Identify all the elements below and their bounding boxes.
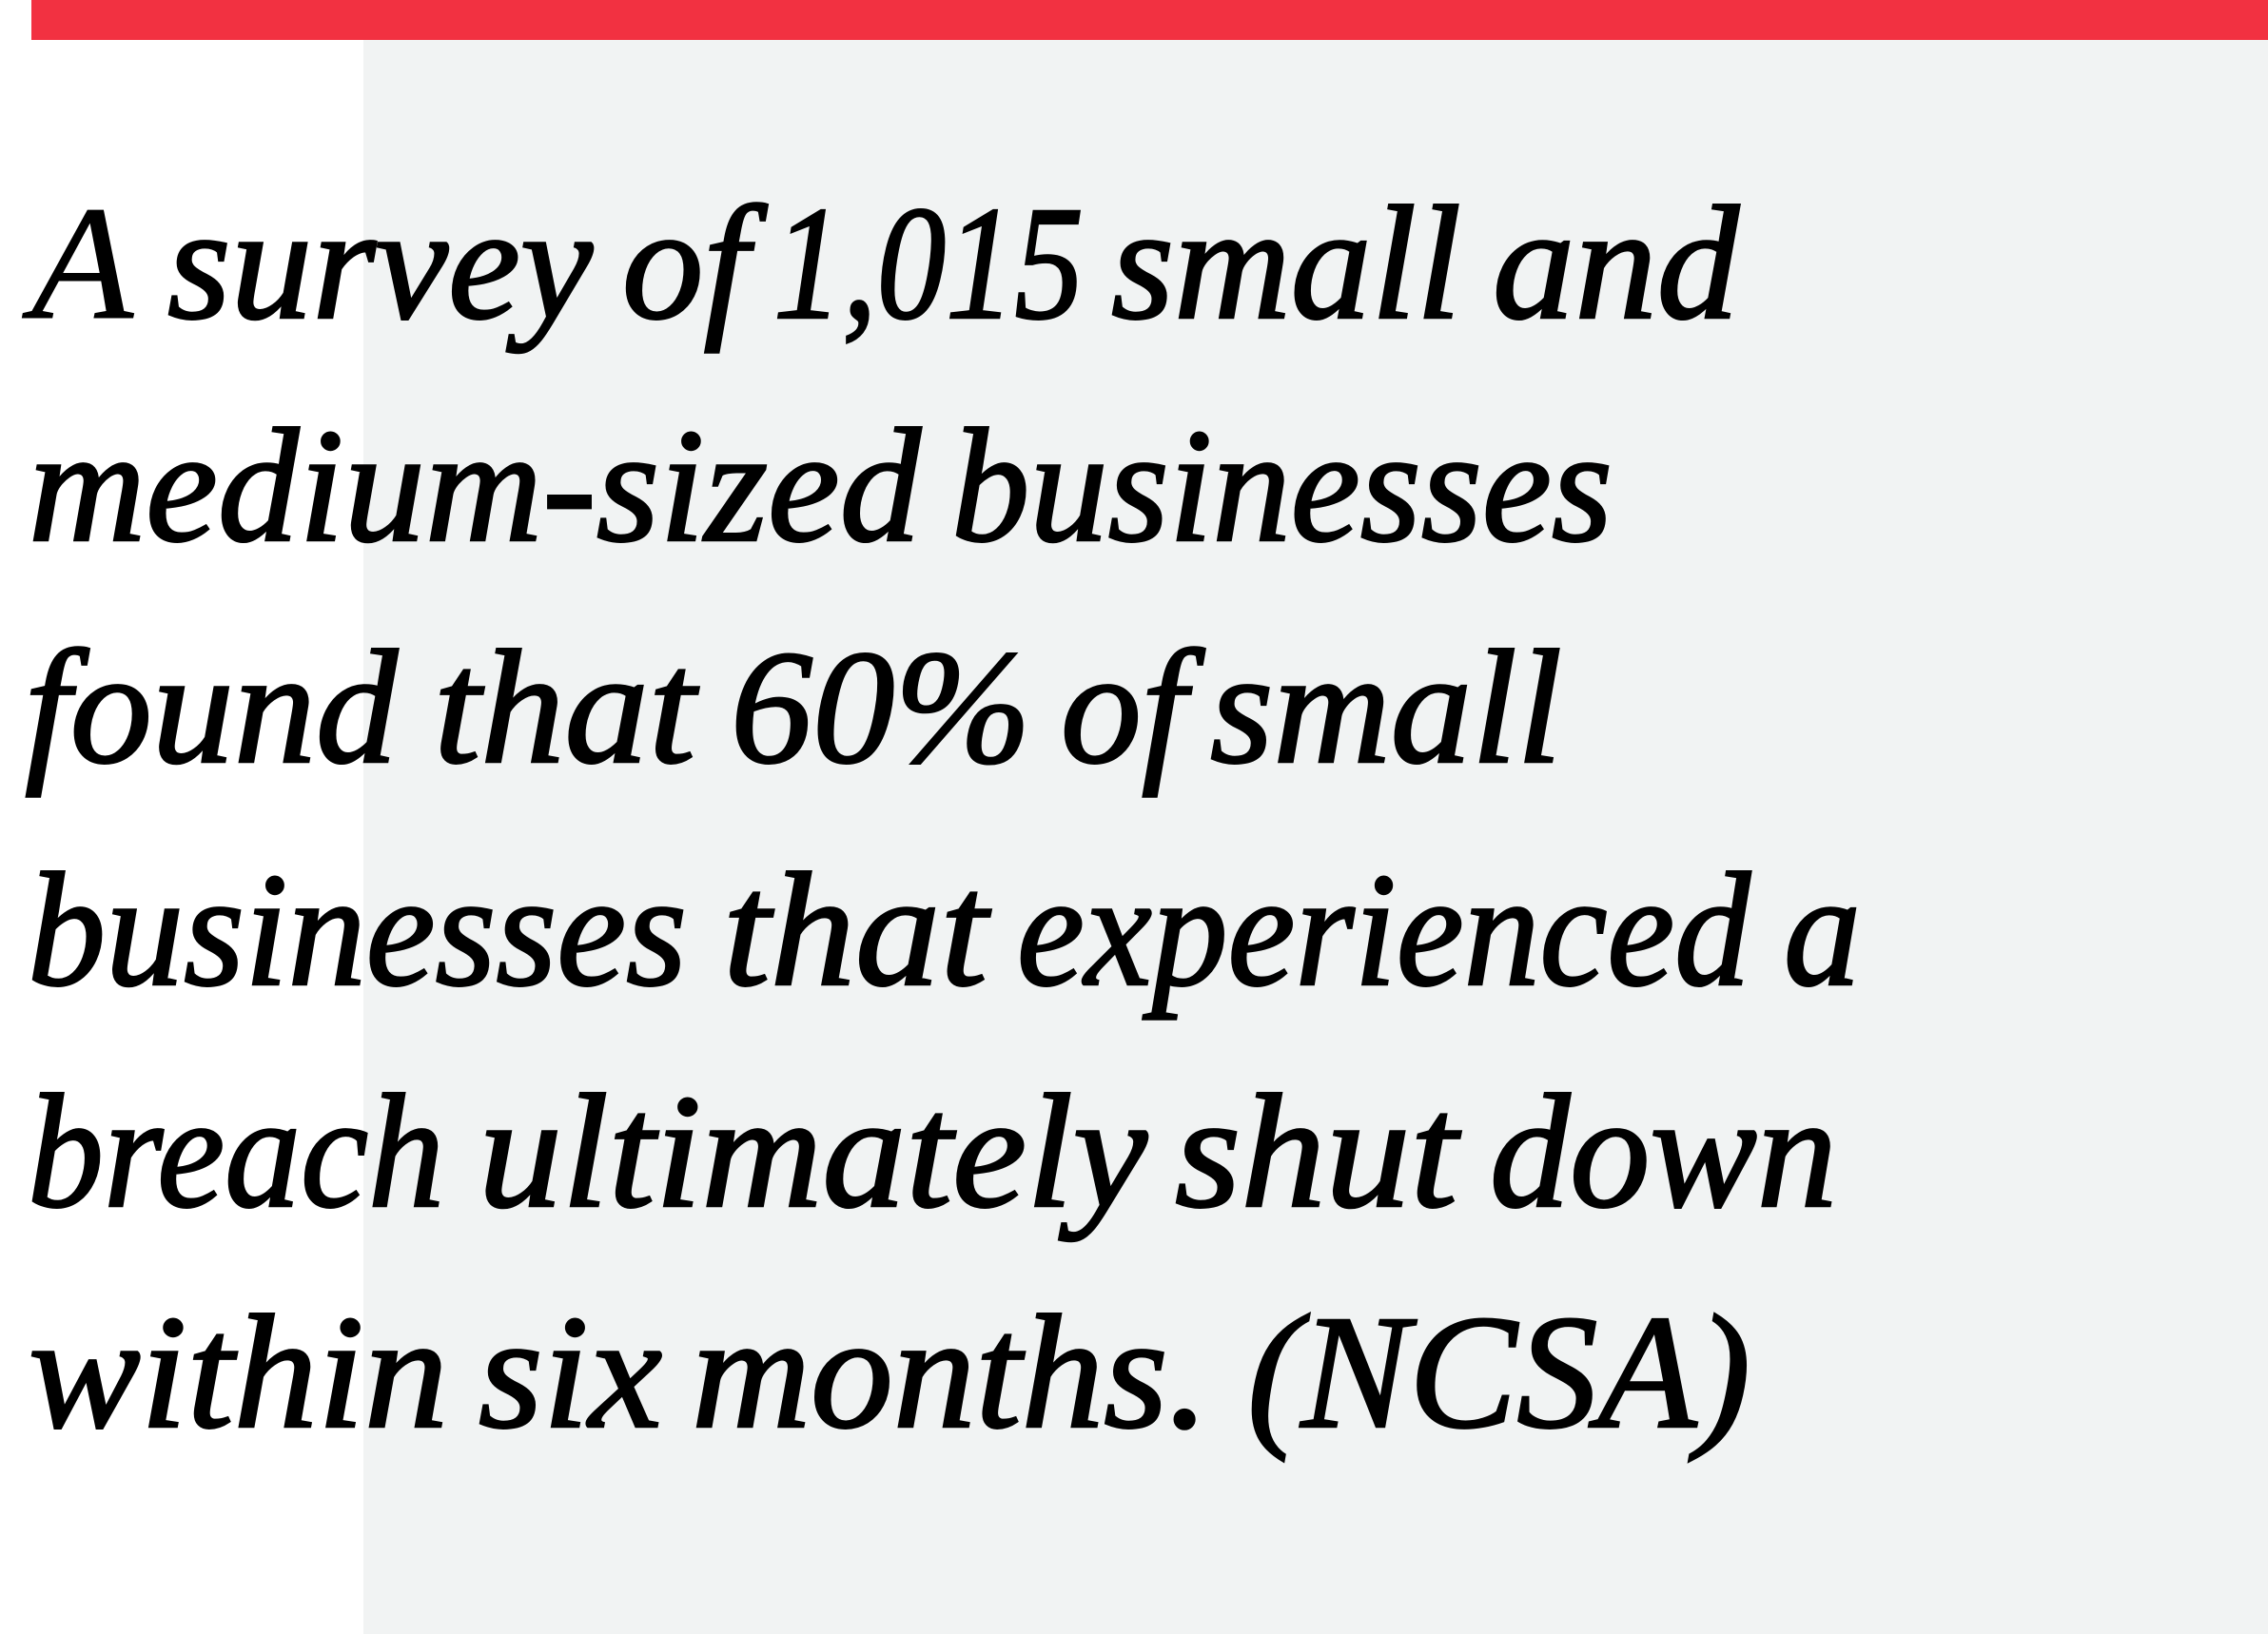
text line 5: shut bbox=[1175, 1061, 1461, 1241]
text line 3: found bbox=[25, 617, 398, 797]
text line 2: medium-sized bbox=[29, 396, 921, 575]
red top bar bbox=[31, 0, 2268, 40]
text line 5: breach bbox=[28, 1061, 444, 1241]
text line 4: businesses bbox=[28, 840, 687, 1020]
text line 3: of bbox=[1061, 617, 1205, 797]
text line 2 bbox=[29, 396, 1613, 575]
quote text block bbox=[22, 173, 1861, 1462]
text line 4: a bbox=[1784, 840, 1861, 1020]
text line 1 bbox=[22, 173, 1740, 353]
text line 2: businesses bbox=[951, 396, 1613, 575]
text line 6: months. bbox=[692, 1282, 1209, 1462]
text line 1: 1,015 bbox=[773, 173, 1084, 353]
text line 1: and bbox=[1493, 173, 1740, 353]
text line 1: survey bbox=[167, 173, 593, 353]
text line 6: six bbox=[479, 1282, 662, 1462]
text line 6: (NCSA) bbox=[1247, 1282, 1750, 1462]
text line 3: that bbox=[434, 617, 699, 797]
text line 3: small bbox=[1210, 617, 1562, 797]
text line 5: down bbox=[1490, 1061, 1837, 1241]
text line 4 bbox=[28, 840, 1861, 1020]
text line 5: ultimately bbox=[479, 1061, 1147, 1241]
text line 1: small bbox=[1111, 173, 1461, 353]
text line 1: A bbox=[22, 173, 135, 353]
text line 1: of bbox=[622, 173, 768, 353]
text line 5 bbox=[28, 1061, 1837, 1241]
text line 3 bbox=[25, 617, 1562, 797]
text line 4: experienced bbox=[1017, 840, 1750, 1020]
text line 6 bbox=[29, 1282, 1750, 1462]
text line 3: 60% bbox=[731, 617, 1031, 797]
text line 4: that bbox=[723, 840, 991, 1020]
text line 6: within bbox=[29, 1282, 448, 1462]
